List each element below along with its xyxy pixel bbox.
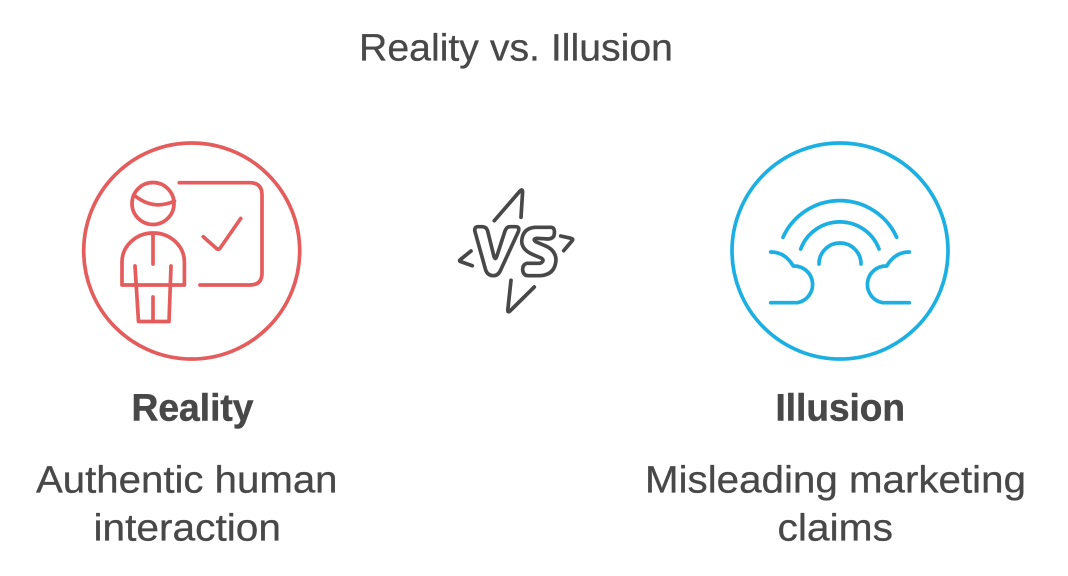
panel: illusion	[645, 143, 1026, 550]
heading: illusion: Illusion	[776, 388, 905, 430]
text: reality description	[36, 460, 338, 550]
text: illusion description: Misleading marketing	[645, 460, 1026, 502]
icon: vs lightning	[460, 190, 573, 312]
icon: person presenting at board in circle	[84, 143, 300, 359]
text: illusion description: claims	[778, 508, 893, 550]
icon: rainbow and clouds in circle	[732, 143, 948, 359]
heading: reality: Reality	[132, 388, 254, 430]
text: reality description: Authentic human	[36, 460, 338, 502]
panel: reality	[36, 143, 338, 550]
text: illusion description	[645, 460, 1026, 550]
text: reality description: interaction	[94, 508, 281, 550]
vs letter outlines	[475, 227, 556, 276]
title: Reality vs. Illusion	[359, 28, 673, 70]
